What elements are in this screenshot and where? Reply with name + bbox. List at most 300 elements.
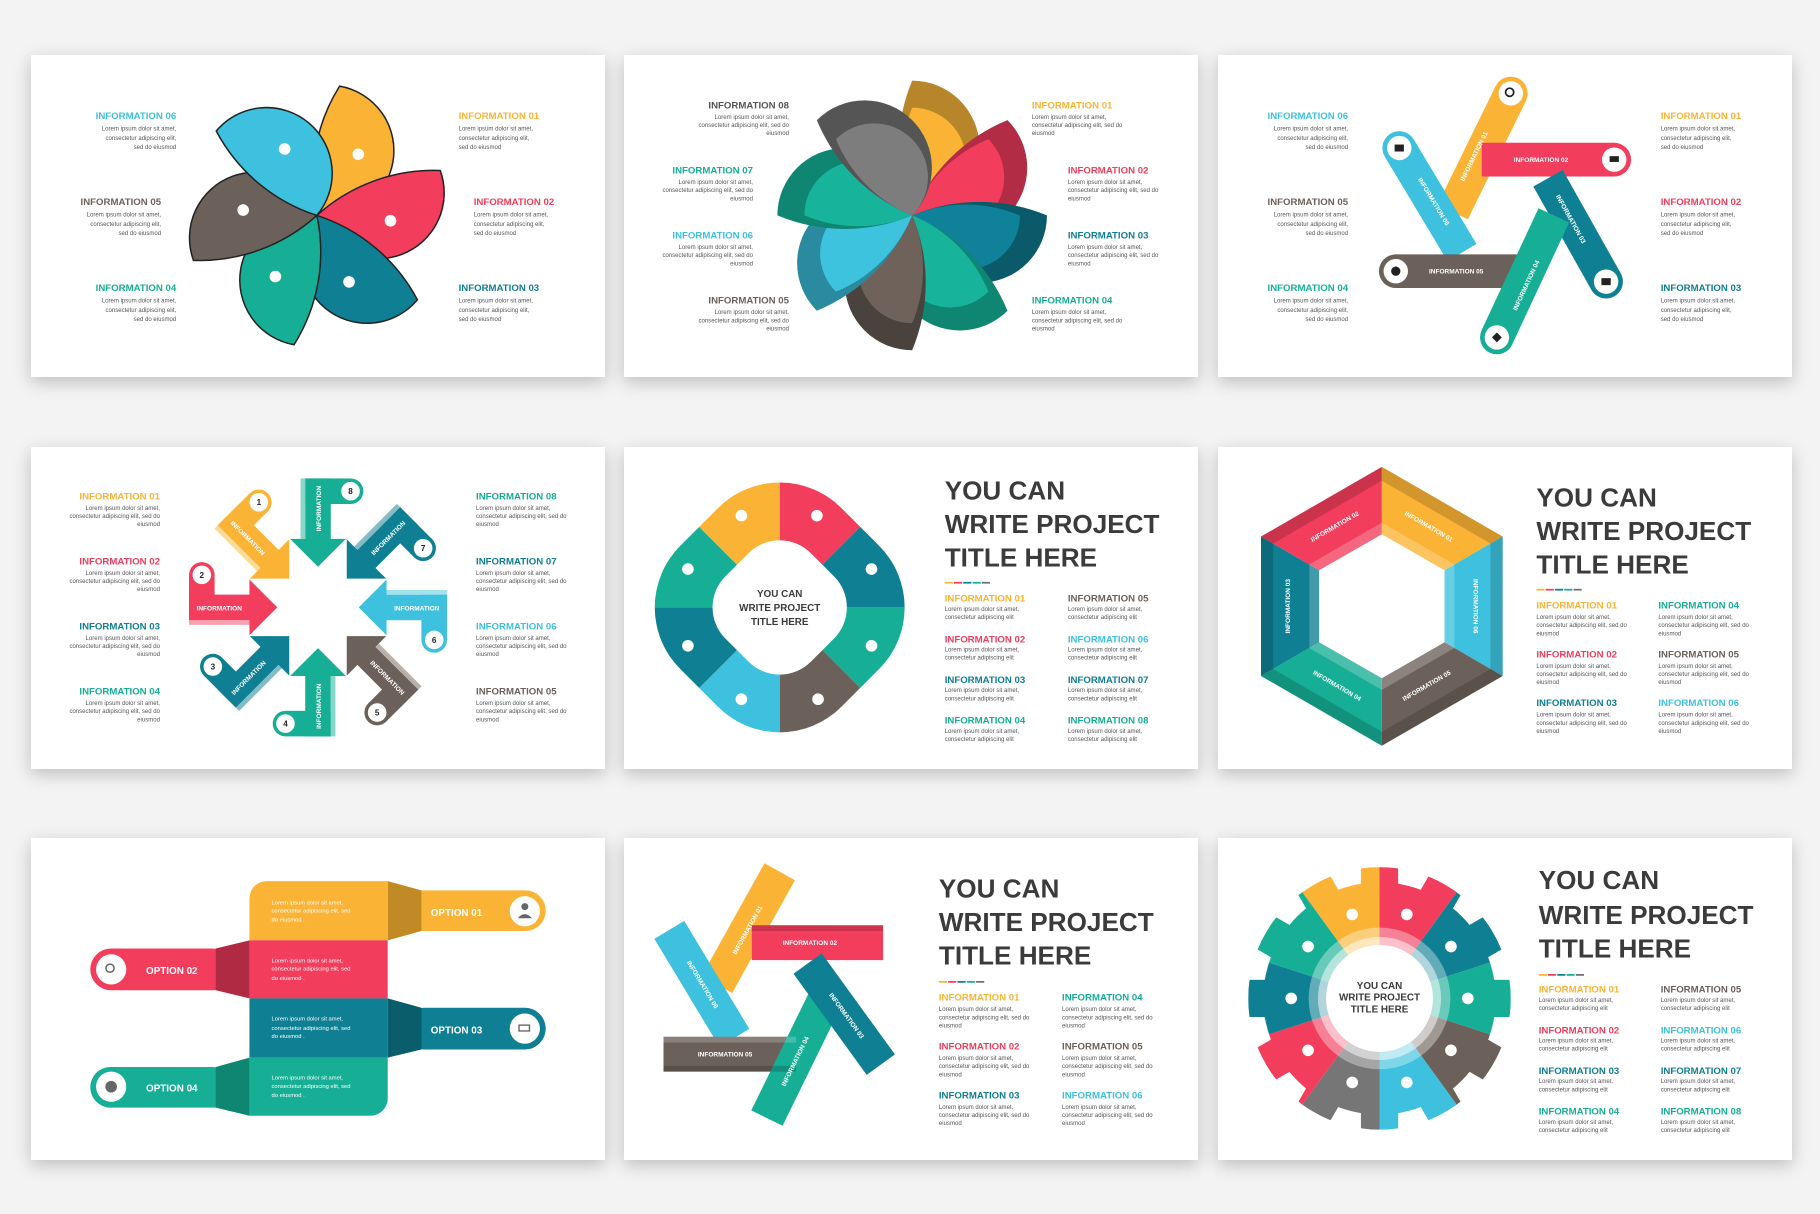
arrows diagram: 5 bbox=[375, 708, 380, 717]
text: information 05: Lorem ipsum dolor sit amet, bbox=[715, 310, 789, 316]
text: information 04 bbox=[1268, 283, 1349, 323]
text: information 06: Lorem ipsum dolor sit amet, bbox=[679, 245, 753, 251]
text: information 01 bbox=[459, 111, 540, 151]
bar labels: INFORMATION 05 bbox=[698, 1052, 753, 1059]
info grid: INFORMATION 04 bbox=[1062, 993, 1143, 1004]
ring chart 8 segments bbox=[654, 482, 905, 732]
info grid: consectetur adipiscing elit, sed do bbox=[1536, 672, 1628, 678]
arrows diagram: 6 bbox=[432, 636, 437, 645]
text: information 05 bbox=[698, 296, 790, 332]
text: information 02: consectetur adipiscing elit, sed do bbox=[69, 579, 161, 585]
text: information 07: eiusmod bbox=[730, 196, 753, 202]
info grid: consectetur adipiscing elit, sed do bbox=[939, 1064, 1030, 1070]
info grid: INFORMATION 02 bbox=[945, 634, 1025, 645]
info grid: Lorem ipsum dolor sit amet, bbox=[939, 1007, 1014, 1013]
text: information 04: sed do eiusmod bbox=[134, 317, 176, 323]
block texts: consectetur adipiscing elit, sed bbox=[272, 1084, 350, 1090]
text: information 03: consectetur adipiscing elit, bbox=[1661, 308, 1732, 314]
text: information 06: Lorem ipsum dolor sit amet, bbox=[1274, 127, 1348, 133]
text: information 02: INFORMATION 02 bbox=[79, 556, 160, 567]
text: information 06 bbox=[476, 621, 567, 658]
text: information 02: Lorem ipsum dolor sit amet, bbox=[86, 571, 160, 577]
text: information 07: eiusmod bbox=[476, 587, 499, 593]
text: information 03 bbox=[1068, 231, 1159, 267]
text: information 06: consectetur adipiscing elit, sed do bbox=[476, 644, 567, 650]
text: information 05: consectetur adipiscing elit, bbox=[1277, 222, 1348, 228]
text: information 03: INFORMATION 03 bbox=[79, 621, 160, 632]
hexagon ring: INFORMATION 05 bbox=[1402, 669, 1453, 703]
text: information 01 bbox=[1661, 111, 1742, 151]
swirl chart 8 petals bbox=[769, 72, 1055, 358]
option labels: OPTION 01 bbox=[431, 908, 483, 919]
info grid: consectetur adipiscing elit bbox=[1539, 1047, 1608, 1053]
text: information 04: INFORMATION 04 bbox=[79, 687, 161, 698]
block texts: do eiusmod . bbox=[272, 1093, 305, 1099]
info grid: consectetur adipiscing elit, sed do bbox=[1658, 672, 1750, 678]
text: information 07: consectetur adipiscing elit, sed do bbox=[662, 188, 754, 194]
bar labels bbox=[685, 904, 865, 1088]
bar labels: INFORMATION 06 bbox=[685, 960, 719, 1010]
arrows diagram: INFORMATION bbox=[316, 486, 323, 531]
text: information 04: consectetur adipiscing elit, bbox=[1277, 308, 1348, 314]
text: information 05: sed do eiusmod bbox=[1306, 231, 1348, 237]
info grid: INFORMATION 01 bbox=[1536, 601, 1618, 612]
text: information 07: Lorem ipsum dolor sit amet, bbox=[679, 180, 753, 186]
center text: TITLE HERE bbox=[751, 617, 809, 628]
bar labels: INFORMATION 06 bbox=[1416, 177, 1450, 227]
swirl chart 6 petals bbox=[171, 81, 463, 350]
text: information 05: eiusmod bbox=[766, 326, 789, 332]
info grid: Lorem ipsum dolor sit amet, bbox=[1658, 713, 1733, 719]
text: information 04: Lorem ipsum dolor sit amet, bbox=[1032, 310, 1107, 316]
text: information 02 bbox=[69, 556, 161, 593]
text: information 02: Lorem ipsum dolor sit amet, bbox=[474, 213, 548, 219]
text: information 04: Lorem ipsum dolor sit amet, bbox=[102, 299, 177, 305]
text: information 03: Lorem ipsum dolor sit amet, bbox=[86, 636, 160, 642]
info grid: Lorem ipsum dolor sit amet, bbox=[1068, 729, 1143, 735]
title: TITLE HERE bbox=[939, 941, 1091, 971]
info grid: Lorem ipsum dolor sit amet, bbox=[945, 688, 1019, 694]
text: information 06: INFORMATION 06 bbox=[1268, 111, 1348, 122]
info grid: consectetur adipiscing elit, sed do bbox=[1658, 721, 1750, 727]
text: information 04: eiusmod bbox=[1032, 326, 1055, 332]
title: TITLE HERE bbox=[1539, 934, 1691, 964]
arrows diagram: 4 bbox=[283, 720, 288, 729]
info grid: eiusmod bbox=[1658, 729, 1681, 735]
info grid: INFORMATION 03 bbox=[1536, 698, 1617, 709]
info grid: INFORMATION 03 bbox=[945, 675, 1025, 686]
text: information 01: INFORMATION 01 bbox=[79, 491, 161, 502]
text: information 04: consectetur adipiscing elit, sed do bbox=[1032, 318, 1123, 324]
info grid: Lorem ipsum dolor sit amet, bbox=[1536, 664, 1611, 670]
text: information 05: INFORMATION 05 bbox=[708, 296, 790, 307]
text: information 08 bbox=[476, 491, 567, 528]
info grid: INFORMATION 05 bbox=[1068, 594, 1149, 605]
info grid: consectetur adipiscing elit, sed do bbox=[1062, 1064, 1153, 1070]
text: information 02 bbox=[1661, 197, 1741, 237]
text: information 05: Lorem ipsum dolor sit amet, bbox=[87, 213, 161, 219]
text: information 01: consectetur adipiscing elit, bbox=[459, 136, 530, 142]
title: WRITE PROJECT bbox=[1536, 516, 1751, 546]
text: information 01: INFORMATION 01 bbox=[459, 111, 540, 122]
text: information 06 bbox=[96, 111, 177, 151]
info grid: consectetur adipiscing elit, sed do bbox=[1536, 623, 1628, 629]
text: information 02: INFORMATION 02 bbox=[1068, 166, 1148, 177]
option labels: OPTION 04 bbox=[146, 1083, 198, 1094]
info grid: Lorem ipsum dolor sit amet, bbox=[1062, 1105, 1137, 1111]
info grid: INFORMATION 02 bbox=[1536, 649, 1617, 660]
text: information 03: consectetur adipiscing elit, bbox=[459, 308, 530, 314]
arrows diagram: INFORMATION bbox=[370, 520, 408, 557]
text: information 06 bbox=[1268, 111, 1348, 151]
block texts: consectetur adipiscing elit, sed bbox=[272, 908, 350, 914]
text: information 03 bbox=[1661, 283, 1741, 323]
info grid: eiusmod bbox=[1536, 680, 1559, 686]
text: information 02: sed do eiusmod bbox=[474, 231, 516, 237]
info grid: Lorem ipsum dolor sit amet, bbox=[945, 729, 1019, 735]
info grid: eiusmod bbox=[1658, 631, 1681, 637]
text: information 06: INFORMATION 06 bbox=[96, 111, 176, 122]
info grid: consectetur adipiscing elit bbox=[945, 737, 1014, 743]
color bar bbox=[1536, 589, 1582, 591]
info grid: INFORMATION 05 bbox=[1661, 985, 1742, 996]
text: information 07: INFORMATION 07 bbox=[672, 166, 753, 177]
text: information 04: INFORMATION 04 bbox=[1268, 283, 1349, 294]
text: information 06: consectetur adipiscing elit, bbox=[105, 136, 177, 142]
info grid: INFORMATION 04 bbox=[1539, 1107, 1620, 1118]
text: information 08: consectetur adipiscing elit, sed do bbox=[476, 514, 567, 520]
arrows diagram bbox=[189, 478, 447, 736]
text: information 03: Lorem ipsum dolor sit amet, bbox=[1068, 245, 1143, 251]
text: information 03: eiusmod bbox=[1068, 261, 1091, 267]
text: information 02: Lorem ipsum dolor sit amet, bbox=[1068, 180, 1143, 186]
info grid: consectetur adipiscing elit, sed do bbox=[1062, 1113, 1153, 1119]
text: information 06: consectetur adipiscing elit, bbox=[1277, 136, 1348, 142]
text: information 05: eiusmod bbox=[476, 717, 499, 723]
info grid: consectetur adipiscing elit bbox=[1539, 1087, 1608, 1093]
info grid: consectetur adipiscing elit bbox=[1068, 656, 1137, 662]
block texts: Lorem ipsum dolor sit amet, bbox=[272, 900, 343, 906]
info grid: consectetur adipiscing elit bbox=[945, 615, 1014, 621]
info grid: consectetur adipiscing elit, sed do bbox=[1536, 721, 1628, 727]
option pills bbox=[90, 881, 546, 1116]
info grid: Lorem ipsum dolor sit amet, bbox=[1539, 1120, 1613, 1126]
info grid: Lorem ipsum dolor sit amet, bbox=[1536, 713, 1611, 719]
bar chart: six rounded bars bbox=[1396, 93, 1614, 337]
panel: slide 8 folded bars bbox=[624, 838, 1198, 1160]
text: information 05 bbox=[476, 687, 567, 723]
text: information 04: Lorem ipsum dolor sit amet, bbox=[1274, 299, 1348, 305]
text: information 03 bbox=[69, 621, 161, 658]
arrows diagram: 1 bbox=[257, 498, 262, 507]
bar labels: INFORMATION 04 bbox=[781, 1035, 811, 1088]
text: information 03: Lorem ipsum dolor sit amet, bbox=[459, 299, 533, 305]
text: information 04: INFORMATION 04 bbox=[1032, 296, 1113, 307]
info grid: Lorem ipsum dolor sit amet, bbox=[1539, 1079, 1613, 1085]
info grid: eiusmod bbox=[1062, 1072, 1085, 1078]
text: information 06: Lorem ipsum dolor sit amet, bbox=[476, 636, 551, 642]
text: information 02: eiusmod bbox=[1068, 196, 1091, 202]
text: information 01: consectetur adipiscing elit, sed do bbox=[69, 514, 161, 520]
info grid bbox=[1539, 985, 1742, 1134]
text: information 04: consectetur adipiscing elit, bbox=[105, 308, 177, 314]
text: information 07: consectetur adipiscing elit, sed do bbox=[476, 579, 567, 585]
title: WRITE PROJECT bbox=[945, 509, 1160, 539]
title: YOU CAN bbox=[945, 475, 1065, 505]
text: information 08: eiusmod bbox=[476, 522, 499, 528]
block texts bbox=[272, 900, 350, 1099]
text: information 02: INFORMATION 02 bbox=[474, 197, 554, 208]
info grid: INFORMATION 01 bbox=[945, 594, 1026, 605]
arrows diagram: 7 bbox=[421, 544, 426, 553]
panel: slide 5 rounded ring bbox=[624, 447, 1198, 769]
text: information 02: consectetur adipiscing elit, bbox=[1661, 222, 1732, 228]
panel: slide 7 options bbox=[31, 838, 605, 1160]
info grid: Lorem ipsum dolor sit amet, bbox=[1062, 1056, 1137, 1062]
info grid: Lorem ipsum dolor sit amet, bbox=[1661, 1120, 1735, 1126]
text: information 06: Lorem ipsum dolor sit amet, bbox=[102, 127, 177, 133]
info grid: Lorem ipsum dolor sit amet, bbox=[1062, 1007, 1137, 1013]
center text: YOU CAN bbox=[1357, 981, 1402, 992]
panel: slide 6 hexagon bbox=[1218, 447, 1792, 769]
arrows diagram: INFORMATION bbox=[197, 605, 242, 612]
info grid: INFORMATION 05 bbox=[1658, 649, 1740, 660]
bar labels: INFORMATION 03 bbox=[827, 992, 865, 1041]
text: information 03: sed do eiusmod bbox=[459, 317, 501, 323]
block texts: do eiusmod . bbox=[272, 918, 305, 924]
center text: WRITE PROJECT bbox=[1339, 993, 1420, 1004]
hexagon ring: INFORMATION 01 bbox=[1403, 510, 1454, 544]
hexagon ring: INFORMATION 03 bbox=[1285, 579, 1292, 633]
title: YOU CAN bbox=[1536, 482, 1657, 512]
color bar bbox=[1539, 974, 1584, 976]
bar chart: six straight bars bbox=[664, 872, 883, 1118]
text: information 07: Lorem ipsum dolor sit amet, bbox=[476, 571, 551, 577]
gear chart bbox=[1285, 907, 1474, 1090]
text: information 02: sed do eiusmod bbox=[1661, 231, 1703, 237]
arrows diagram: 3 bbox=[211, 662, 216, 671]
text: information 05: Lorem ipsum dolor sit amet, bbox=[1274, 213, 1348, 219]
text: information 04 bbox=[69, 687, 161, 723]
bar labels: INFORMATION 02 bbox=[1514, 157, 1569, 164]
text: information 02 bbox=[1068, 166, 1159, 202]
text: information 05: INFORMATION 05 bbox=[81, 197, 162, 208]
text: information 01 bbox=[69, 491, 161, 528]
text: information 03: eiusmod bbox=[137, 652, 160, 658]
text: information 04: eiusmod bbox=[137, 717, 160, 723]
option labels bbox=[146, 908, 483, 1094]
text: information 02: Lorem ipsum dolor sit amet, bbox=[1661, 213, 1735, 219]
info grid: INFORMATION 06 bbox=[1658, 698, 1739, 709]
hexagon ring: INFORMATION 02 bbox=[1310, 510, 1361, 544]
bar labels: INFORMATION 05 bbox=[1429, 269, 1484, 276]
text: information 01: Lorem ipsum dolor sit amet, bbox=[459, 127, 533, 133]
info grid: eiusmod bbox=[1658, 680, 1681, 686]
info grid: Lorem ipsum dolor sit amet, bbox=[1658, 664, 1733, 670]
hexagon ring bbox=[1261, 467, 1503, 746]
info grid: eiusmod bbox=[1536, 631, 1559, 637]
text: information 05: Lorem ipsum dolor sit amet, bbox=[476, 701, 551, 707]
text: information 05: sed do eiusmod bbox=[119, 231, 161, 237]
text: information 02 bbox=[474, 197, 554, 237]
hexagon ring: INFORMATION 04 bbox=[1311, 670, 1362, 703]
info grid: INFORMATION 07 bbox=[1661, 1066, 1741, 1077]
text: information 03: INFORMATION 03 bbox=[1661, 283, 1741, 294]
text: information 04 bbox=[1032, 296, 1123, 332]
arrows diagram: 8 bbox=[348, 487, 353, 496]
info grid: consectetur adipiscing elit, sed do bbox=[939, 1015, 1030, 1021]
info grid: eiusmod bbox=[1536, 729, 1559, 735]
text: information 05: INFORMATION 05 bbox=[476, 687, 557, 698]
info grid: Lorem ipsum dolor sit amet, bbox=[1068, 648, 1143, 654]
text: information 03: INFORMATION 03 bbox=[459, 283, 539, 294]
text: information 02: consectetur adipiscing elit, sed do bbox=[1068, 188, 1159, 194]
text: information 05: consectetur adipiscing elit, sed do bbox=[476, 709, 567, 715]
info grid: consectetur adipiscing elit bbox=[1068, 737, 1137, 743]
info grid: eiusmod bbox=[939, 1023, 962, 1029]
block texts: do eiusmod . bbox=[272, 1034, 305, 1040]
title: TITLE HERE bbox=[945, 543, 1097, 573]
text: information 04: Lorem ipsum dolor sit amet, bbox=[86, 701, 160, 707]
info grid: consectetur adipiscing elit bbox=[1539, 1128, 1608, 1134]
text: information 05 bbox=[1268, 197, 1349, 237]
info grid: Lorem ipsum dolor sit amet, bbox=[939, 1105, 1014, 1111]
info grid: consectetur adipiscing elit bbox=[1539, 1006, 1608, 1012]
text: information 03: INFORMATION 03 bbox=[1068, 231, 1148, 242]
info grid: INFORMATION 01 bbox=[1539, 985, 1620, 996]
info grid: INFORMATION 03 bbox=[939, 1090, 1019, 1101]
info grid: INFORMATION 01 bbox=[939, 993, 1020, 1004]
arrows diagram: INFORMATION bbox=[316, 683, 323, 729]
title: YOU CAN bbox=[939, 873, 1059, 903]
info grid: Lorem ipsum dolor sit amet, bbox=[1539, 998, 1613, 1004]
info grid: INFORMATION 07 bbox=[1068, 675, 1148, 686]
info grid: Lorem ipsum dolor sit amet, bbox=[945, 607, 1019, 613]
info grid: eiusmod bbox=[1062, 1023, 1085, 1029]
text: information 03 bbox=[459, 283, 539, 323]
block texts: Lorem ipsum dolor sit amet, bbox=[272, 1016, 343, 1022]
info grid: Lorem ipsum dolor sit amet, bbox=[939, 1056, 1014, 1062]
block texts: consectetur adipiscing elit, sed bbox=[272, 967, 350, 973]
text: information 06: eiusmod bbox=[476, 652, 499, 658]
text: information 08: Lorem ipsum dolor sit amet, bbox=[476, 506, 551, 512]
info grid: Lorem ipsum dolor sit amet, bbox=[1536, 615, 1611, 621]
text: information 08: Lorem ipsum dolor sit amet, bbox=[715, 115, 789, 121]
text: information 05: consectetur adipiscing elit, sed do bbox=[698, 318, 790, 324]
panel: slide 2 eight-petal swirl bbox=[624, 55, 1198, 377]
text: information 03: sed do eiusmod bbox=[1661, 317, 1703, 323]
info grid: Lorem ipsum dolor sit amet, bbox=[1658, 615, 1733, 621]
title: TITLE HERE bbox=[1536, 550, 1689, 580]
text: information 06: consectetur adipiscing elit, sed do bbox=[662, 253, 754, 259]
info grid: INFORMATION 08 bbox=[1661, 1107, 1742, 1118]
info grid: INFORMATION 06 bbox=[1062, 1090, 1143, 1101]
info grid: consectetur adipiscing elit bbox=[945, 656, 1014, 662]
text: information 02: consectetur adipiscing elit, bbox=[474, 222, 545, 228]
block texts: Lorem ipsum dolor sit amet, bbox=[272, 958, 343, 964]
block texts: consectetur adipiscing elit, sed bbox=[272, 1026, 350, 1032]
center text: TITLE HERE bbox=[1351, 1004, 1409, 1015]
text: information 06 bbox=[662, 231, 754, 267]
title: WRITE PROJECT bbox=[939, 907, 1154, 937]
option labels: OPTION 03 bbox=[431, 1025, 483, 1036]
color bar bbox=[945, 582, 990, 584]
text: information 08: eiusmod bbox=[766, 131, 789, 137]
text: information 06: sed do eiusmod bbox=[134, 145, 176, 151]
text: information 02: eiusmod bbox=[137, 587, 160, 593]
info grid: eiusmod bbox=[939, 1121, 962, 1127]
arrows diagram: INFORMATION bbox=[394, 605, 440, 612]
arrows diagram: INFORMATION bbox=[229, 520, 266, 557]
hexagon ring: INFORMATION 06 bbox=[1472, 579, 1479, 634]
info grid bbox=[945, 594, 1149, 743]
info grid: INFORMATION 03 bbox=[1539, 1066, 1619, 1077]
icons: option circles bbox=[96, 896, 540, 1102]
text: information 04: consectetur adipiscing elit, sed do bbox=[69, 709, 161, 715]
bar labels: INFORMATION 03 bbox=[1554, 194, 1587, 245]
text: information 07: INFORMATION 07 bbox=[476, 556, 557, 567]
text: information 06: INFORMATION 06 bbox=[672, 231, 753, 242]
info grid: INFORMATION 04 bbox=[945, 716, 1026, 727]
text: information 05: INFORMATION 05 bbox=[1268, 197, 1349, 208]
text: information 01: Lorem ipsum dolor sit amet, bbox=[86, 506, 160, 512]
color bar bbox=[939, 981, 984, 983]
title: WRITE PROJECT bbox=[1539, 900, 1754, 930]
text: information 01: Lorem ipsum dolor sit amet, bbox=[1661, 127, 1735, 133]
text: information 02: INFORMATION 02 bbox=[1661, 197, 1741, 208]
info grid: consectetur adipiscing elit bbox=[1661, 1006, 1730, 1012]
text: information 01 bbox=[1032, 101, 1123, 137]
option labels: OPTION 02 bbox=[146, 966, 198, 977]
text: information 07 bbox=[476, 556, 567, 593]
text: information 08 bbox=[698, 101, 790, 137]
text: information 08: INFORMATION 08 bbox=[476, 491, 557, 502]
info grid: eiusmod bbox=[939, 1072, 962, 1078]
info grid: Lorem ipsum dolor sit amet, bbox=[1539, 1039, 1613, 1045]
info grid: consectetur adipiscing elit, sed do bbox=[1658, 623, 1750, 629]
bar labels: INFORMATION 01 bbox=[732, 904, 765, 956]
panel: slide 1 six-petal swirl bbox=[31, 55, 605, 377]
panel: slide 4 eight arrows bbox=[31, 447, 605, 769]
title: YOU CAN bbox=[1539, 865, 1659, 895]
info grid: Lorem ipsum dolor sit amet, bbox=[1661, 998, 1735, 1004]
text: information 03: consectetur adipiscing elit, sed do bbox=[1068, 253, 1159, 259]
info grid: consectetur adipiscing elit bbox=[1661, 1087, 1730, 1093]
text: information 06: eiusmod bbox=[730, 261, 753, 267]
option blocks bbox=[249, 881, 388, 1116]
info grid: INFORMATION 05 bbox=[1062, 1042, 1143, 1053]
info grid: consectetur adipiscing elit, sed do bbox=[939, 1113, 1030, 1119]
bar labels: INFORMATION 01 bbox=[1460, 130, 1490, 183]
text: information 04: sed do eiusmod bbox=[1306, 317, 1348, 323]
center text: WRITE PROJECT bbox=[739, 603, 820, 614]
text: information 01: INFORMATION 01 bbox=[1032, 101, 1113, 112]
panel: slide 9 gear bbox=[1218, 838, 1792, 1160]
text: information 05: consectetur adipiscing elit, bbox=[90, 222, 161, 228]
info grid bbox=[1536, 601, 1750, 735]
bar labels bbox=[1416, 130, 1587, 312]
info grid: Lorem ipsum dolor sit amet, bbox=[1661, 1039, 1735, 1045]
info grid: consectetur adipiscing elit bbox=[1661, 1128, 1730, 1134]
text: information 01: eiusmod bbox=[1032, 131, 1055, 137]
info grid: INFORMATION 02 bbox=[1539, 1025, 1619, 1036]
bar labels: INFORMATION 04 bbox=[1512, 259, 1542, 312]
text: information 06: INFORMATION 06 bbox=[476, 621, 557, 632]
text: information 07 bbox=[662, 166, 754, 202]
bar labels: INFORMATION 02 bbox=[783, 940, 837, 947]
text: information 01: consectetur adipiscing elit, sed do bbox=[1032, 123, 1123, 129]
info grid: INFORMATION 06 bbox=[1661, 1025, 1741, 1036]
